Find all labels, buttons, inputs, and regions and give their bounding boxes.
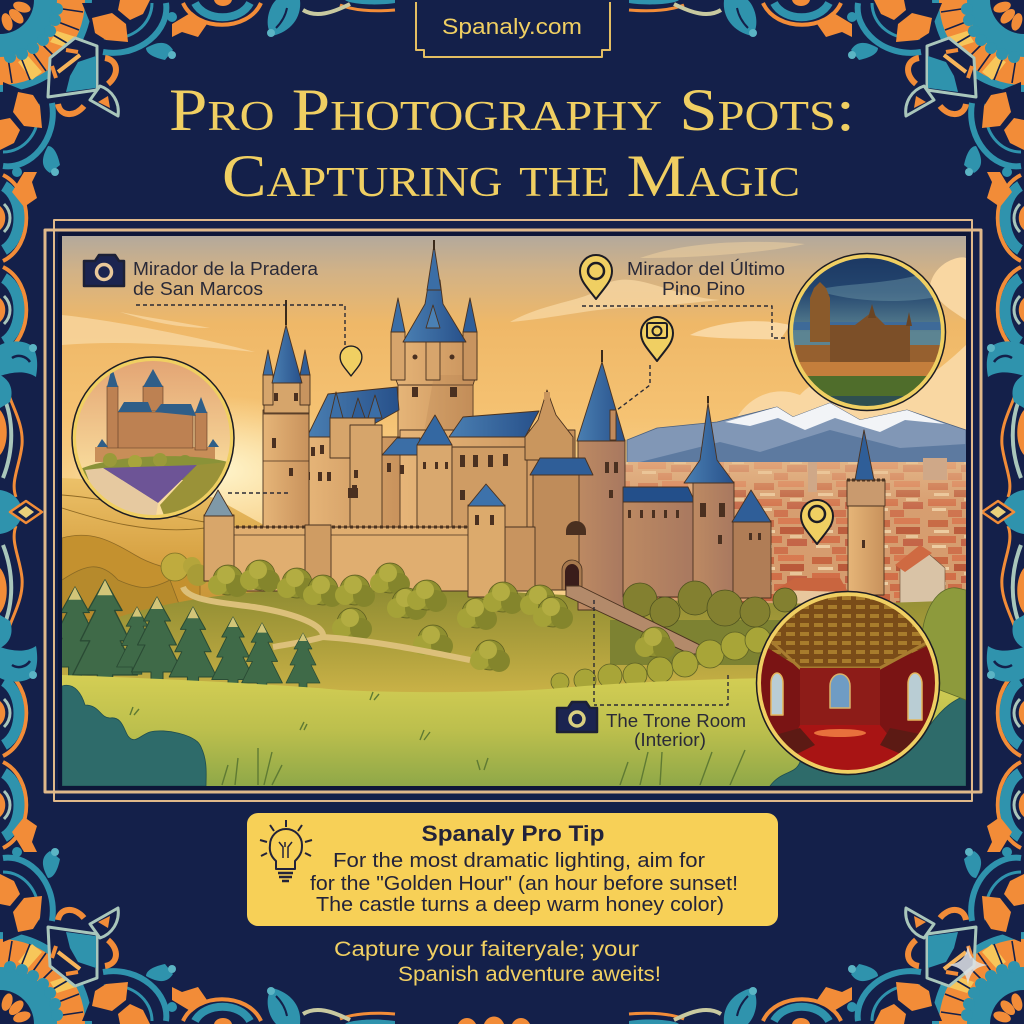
pine trees xyxy=(48,580,320,690)
mountains xyxy=(626,402,966,462)
mid-ground slope xyxy=(62,592,932,692)
tip text xyxy=(310,821,738,916)
label: Mirador de la Pradera: Mirador de la Pradera xyxy=(133,259,319,279)
site badge xyxy=(416,2,610,57)
ornament: right edge xyxy=(982,171,1024,852)
inset: throne room xyxy=(755,590,940,780)
inset: castle on floating island xyxy=(70,355,240,525)
castle: central halls xyxy=(306,387,575,529)
tip text: Spanaly Pro Tip xyxy=(422,821,604,846)
dashed callout lines xyxy=(136,305,787,705)
foreground shrubs xyxy=(62,685,966,786)
inset: cathedral xyxy=(785,250,950,415)
pin: town marker xyxy=(801,500,833,544)
castle: east wing xyxy=(623,396,771,598)
pin: Mirador del Ultimo xyxy=(580,255,612,299)
label: throne room xyxy=(606,711,746,750)
title xyxy=(169,77,855,209)
ornament: left edge xyxy=(0,171,42,852)
label: Mirador de la Pradera xyxy=(134,262,318,295)
closing line xyxy=(334,938,661,986)
sky xyxy=(62,236,966,596)
icon: camera, throne room xyxy=(557,702,597,732)
castle: keep xyxy=(390,240,478,436)
title: Pro Photography Spots: xyxy=(169,77,855,143)
pro tip callout xyxy=(247,813,778,926)
foreground meadow xyxy=(62,675,966,786)
site badge: Spanaly.com xyxy=(442,14,582,39)
castle: right side tower and gatehouse xyxy=(530,350,625,610)
picture frame xyxy=(45,220,981,801)
tip text: The castle turns a deep warm honey color) xyxy=(316,894,724,916)
trees at the right edge xyxy=(921,588,966,700)
label: throne room: The Trone Room xyxy=(606,711,746,731)
castle xyxy=(204,240,771,610)
distant hills xyxy=(62,478,262,623)
label: Mirador de la Pradera: de San Marcos xyxy=(133,279,263,299)
winding path xyxy=(183,587,470,660)
ornament: bottom edge xyxy=(183,987,841,1024)
label: throne room: (Interior) xyxy=(634,730,706,750)
illustrated castle scene xyxy=(48,236,966,786)
closing line: Spanish adventure aweits! xyxy=(398,963,661,986)
tip text: for the "Golden Hour" (an hour before sunset! xyxy=(310,873,738,895)
distant town xyxy=(626,458,966,604)
pin: camera marker xyxy=(641,317,673,361)
icon: camera, Mirador de la Pradera xyxy=(84,255,124,286)
town tower xyxy=(847,430,885,595)
label: Mirador del Ultimo: Pino Pino xyxy=(662,279,745,299)
castle ramp xyxy=(566,586,706,654)
trees behind the east wing xyxy=(610,581,797,665)
pin: plain marker on the keep xyxy=(340,346,362,376)
closing line: Capture your faiteryale; your xyxy=(334,938,639,961)
icon: light bulb xyxy=(260,820,312,881)
label: Mirador del Ultimo xyxy=(628,258,784,295)
hedge above the meadow xyxy=(551,627,771,691)
ornament: top edge xyxy=(183,0,841,37)
bushes along the castle base xyxy=(208,560,675,672)
label: Mirador del Ultimo: Mirador del Último xyxy=(627,258,785,279)
title: Capturing the Magic xyxy=(222,143,800,209)
grass tufts xyxy=(130,692,745,785)
castle: round tower left xyxy=(263,300,310,530)
icon: sparkle watermark xyxy=(948,945,988,985)
tip text: For the most dramatic lighting, aim for xyxy=(333,850,705,872)
castle: curtain wall xyxy=(204,484,535,597)
